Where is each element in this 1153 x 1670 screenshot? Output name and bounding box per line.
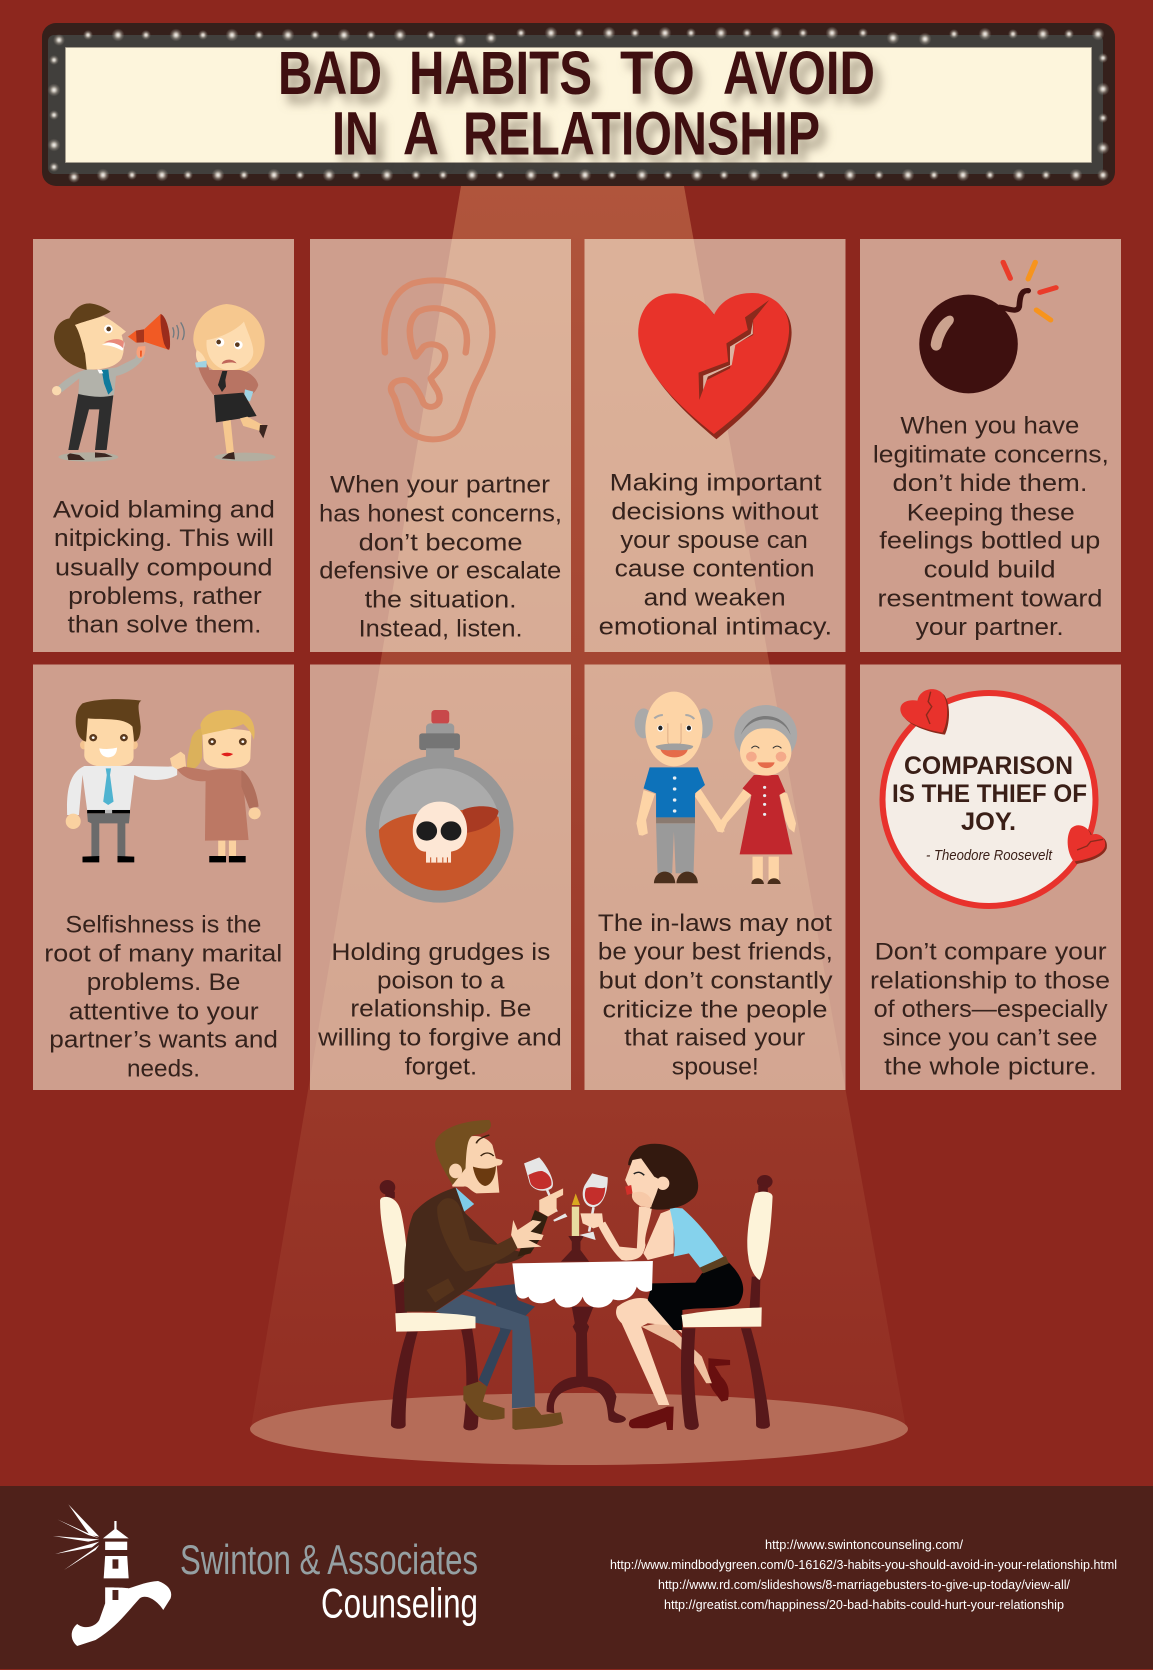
text: in-laws: The in-laws may not — [598, 910, 832, 937]
left chair seat — [395, 1313, 475, 1332]
marquee banner — [42, 23, 1115, 186]
text: bottled feelings: don’t hide them. — [892, 470, 1088, 497]
icon: ear — [384, 280, 492, 439]
text: listening: defensive or escalate — [319, 558, 561, 585]
text: grudges: forget. — [405, 1053, 477, 1080]
text: bottled feelings: Keeping these — [907, 500, 1075, 527]
icon: broken heart — [638, 293, 792, 439]
icon: elderly couple holding hands — [635, 692, 797, 884]
logo text: Swinton & Associates — [180, 1536, 478, 1583]
title: A — [403, 100, 439, 168]
spotlight floor pool — [250, 1393, 908, 1465]
panel grid backgrounds — [33, 239, 1121, 1090]
right chair — [681, 1175, 773, 1430]
text: blaming: usually compound — [55, 554, 272, 581]
source links: http://www.mindbodygreen.com/0-16162/3-habits-you-should-avoid-in-your-relationship.html — [610, 1557, 1117, 1572]
text: in-laws: that raised your — [624, 1025, 805, 1052]
text: bottled feelings — [873, 412, 1109, 641]
logo: lighthouse — [53, 1504, 171, 1646]
man — [404, 1120, 563, 1430]
text: bottled feelings: your partner. — [916, 614, 1064, 641]
text: grudges: Holding grudges is — [331, 939, 550, 966]
title — [278, 39, 875, 168]
icon: bomb with lit fuse — [919, 262, 1056, 393]
source links: http://greatist.com/happiness/20-bad-habits-could-hurt-your-relationship — [664, 1597, 1064, 1612]
source links: http://www.rd.com/slideshows/8-marriagebusters-to-give-up-today/view-all/ — [658, 1577, 1070, 1592]
quote text — [892, 752, 1087, 836]
icon: poison bottle with skull — [366, 710, 514, 903]
quote text: COMPARISON — [904, 752, 1073, 780]
text: selfishness: needs. — [127, 1056, 200, 1083]
text: bottled feelings: resentment toward — [878, 585, 1102, 612]
text: decisions: your spouse can — [620, 527, 808, 554]
title: HABITS — [409, 39, 592, 107]
text: in-laws: spouse! — [672, 1053, 759, 1080]
text: selfishness — [44, 911, 282, 1083]
text: decisions — [599, 470, 832, 640]
footer band — [0, 1486, 1153, 1669]
icon: man with megaphone shouting at woman — [52, 303, 276, 462]
title: IN — [332, 100, 379, 168]
text: in-laws: be your best friends, — [598, 939, 833, 966]
text: blaming: Avoid blaming and — [53, 496, 275, 523]
logo text — [180, 1536, 478, 1627]
text: listening — [319, 471, 562, 643]
text: bottled feelings: legitimate concerns, — [873, 441, 1109, 468]
title: BAD — [278, 39, 382, 107]
text: selfishness: root of many marital — [44, 940, 282, 967]
text: decisions: cause contention — [615, 556, 815, 583]
logo text: Counseling — [321, 1580, 478, 1627]
marquee light bulbs — [48, 26, 1110, 183]
text: comparison: relationship to those — [870, 967, 1110, 994]
text: decisions: and weaken — [644, 585, 786, 612]
text: blaming — [53, 496, 275, 639]
text: listening: Instead, listen. — [359, 616, 523, 643]
text: listening: When your partner — [330, 471, 550, 498]
spotlight beam — [251, 186, 906, 1428]
wine glass: hers — [579, 1173, 608, 1240]
text: listening: the situation. — [365, 587, 517, 614]
text: selfishness: attentive to your — [69, 998, 259, 1025]
text: grudges: relationship. Be — [350, 996, 531, 1023]
icon: man and woman high five — [66, 699, 261, 862]
illustration: couple on a dinner date — [380, 1120, 773, 1430]
text: comparison — [870, 939, 1110, 1080]
quote attribution: - Theodore Roosevelt — [926, 847, 1053, 864]
text: comparison: since you can’t see — [882, 1025, 1098, 1052]
text: in-laws: but don’t constantly — [599, 967, 833, 994]
text: decisions: Making important — [610, 470, 822, 497]
text: bottled feelings: When you have — [900, 412, 1079, 439]
text: in-laws — [598, 910, 833, 1080]
title: TO — [620, 39, 695, 107]
text: decisions: decisions without — [611, 498, 819, 525]
candle — [561, 1193, 589, 1262]
woman — [598, 1144, 743, 1430]
quote text: IS THE THIEF OF — [892, 780, 1087, 808]
text: bottled feelings: could build — [924, 556, 1056, 583]
text: comparison: Don’t compare your — [875, 939, 1107, 966]
title: RELATIONSHIP — [463, 100, 820, 168]
text: listening: has honest concerns, — [319, 501, 562, 528]
text: comparison: the whole picture. — [884, 1053, 1097, 1080]
left chair — [380, 1180, 479, 1430]
text: blaming: than solve them. — [68, 612, 262, 639]
quote circle — [882, 693, 1096, 906]
text: selfishness: Selfishness is the — [65, 911, 261, 938]
text: listening: don’t become — [359, 530, 523, 557]
text: decisions: emotional intimacy. — [599, 613, 832, 640]
text: selfishness: problems. Be — [87, 969, 240, 996]
title: AVOID — [723, 39, 875, 107]
text: in-laws: criticize the people — [602, 996, 828, 1023]
text: selfishness: partner’s wants and — [49, 1027, 278, 1054]
text: grudges — [317, 939, 562, 1080]
source links — [610, 1537, 1117, 1612]
icon: cracked hearts — [900, 689, 1107, 864]
table — [512, 1261, 653, 1423]
text: blaming: problems, rather — [68, 583, 262, 610]
quote text: JOY. — [961, 808, 1016, 836]
source links: http://www.swintoncounseling.com/ — [765, 1537, 963, 1552]
text: bottled feelings: feelings bottled up — [879, 527, 1100, 554]
text: grudges: willing to forgive and — [317, 1025, 562, 1052]
text: blaming: nitpicking. This will — [54, 525, 274, 552]
text: comparison: of others—especially — [874, 996, 1108, 1023]
text: grudges: poison to a — [377, 967, 505, 994]
wine glass: his — [524, 1157, 567, 1222]
quote badge — [882, 689, 1107, 906]
